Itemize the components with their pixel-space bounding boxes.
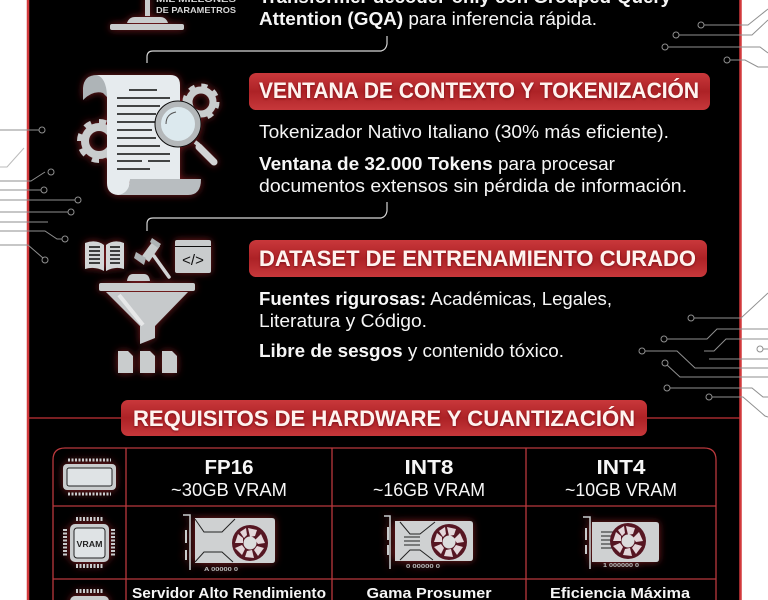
icon: parameter stand [110, 0, 184, 30]
icon: sources and funnel [85, 238, 211, 373]
column: FP16 [171, 457, 287, 500]
icon: code window: </> [182, 252, 204, 269]
column: FP16: FP16 [204, 457, 254, 479]
heading: curated dataset: DATASET DE ENTRENAMIENTO CURADO [259, 246, 696, 271]
column: FP16: ~30GB VRAM [171, 480, 287, 500]
icon: document and magnifier [80, 75, 217, 195]
icon: right gear [185, 86, 217, 118]
icon: graphics card INT4: 1 000000 0 [603, 563, 639, 569]
heading: hardware requirements [121, 400, 647, 436]
circuit decoration: left [0, 127, 81, 263]
column: INT8 [373, 457, 485, 500]
text block: context window: documentos extensos sin pérdida de información. [259, 176, 687, 196]
column: INT8: ~16GB VRAM [373, 480, 485, 500]
icon: chip row one [63, 460, 116, 494]
text block: curated dataset [259, 289, 612, 361]
icon: open book [85, 241, 124, 271]
icon: chip row three [70, 591, 109, 600]
text block: architecture [259, 0, 671, 29]
icon: VRAM chip: VRAM [76, 540, 103, 549]
column: INT4: ~10GB VRAM [565, 480, 677, 500]
column: INT4: INT4 [596, 457, 646, 479]
icon: left gear [80, 122, 118, 160]
connector: second to third section [147, 202, 387, 231]
text block: context window [259, 122, 687, 196]
column: INT8: INT8 [404, 457, 454, 479]
heading: hardware requirements: REQUISITOS DE HARDWARE Y CUANTIZACIÓN [133, 406, 635, 431]
parameter label: DE PARAMETROS [156, 5, 236, 15]
text block: curated dataset: Libre de sesgos y contenido tóxico. [259, 341, 564, 361]
text block: architecture: Attention (GQA) para inferencia rápida. [259, 9, 597, 29]
icon: graphics card FP16 [183, 515, 275, 573]
heading: curated dataset [249, 240, 707, 277]
icon: graphics card INT8 [384, 516, 473, 570]
column: INT4 [565, 457, 677, 500]
icon: graphics card FP16: A 00000 0 [204, 567, 238, 573]
connector: first to second section [147, 36, 387, 63]
text block: curated dataset: Literatura y Código. [259, 311, 427, 331]
icon: graphics card INT4 [583, 517, 659, 569]
heading: context window [249, 73, 710, 110]
icon: graphics card INT8: 0 00000 0 [406, 564, 440, 570]
text block: curated dataset: Fuentes rigurosas: Académicas, Legales, [259, 289, 612, 309]
circuit decoration: right [639, 9, 768, 417]
icon: VRAM chip [65, 519, 113, 566]
icon: gavel [127, 238, 169, 281]
text block: context window: Ventana de 32.000 Tokens para procesar [259, 154, 615, 174]
parameter label [156, 0, 236, 15]
table: quantization [53, 448, 716, 600]
heading: context window: VENTANA DE CONTEXTO Y TOKENIZACIÓN [259, 78, 699, 103]
text block: context window: Tokenizador Nativo Italiano (30% más eficiente). [259, 122, 669, 142]
